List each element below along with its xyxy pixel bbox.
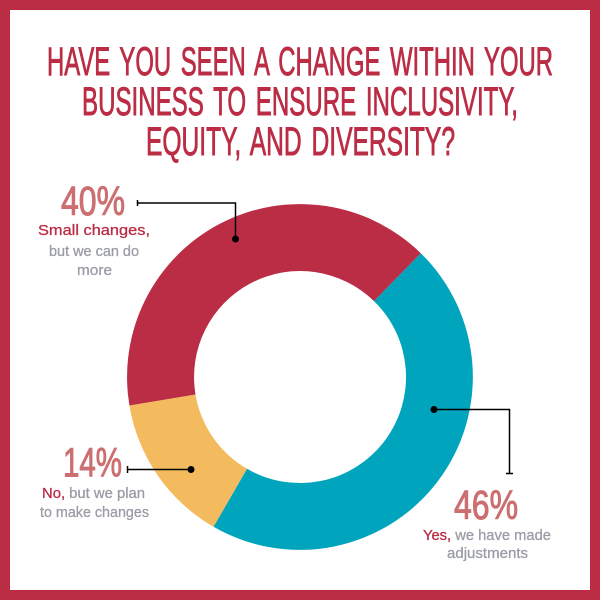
- label: 40% small changes: but we can do: [49, 243, 139, 260]
- segment: yes 46%: [214, 253, 473, 550]
- segment: small changes 40%: [127, 204, 421, 406]
- leader line: 46%: [430, 406, 513, 474]
- label: 14% no: to make changes: [40, 504, 149, 521]
- segment: no 14%: [129, 394, 247, 527]
- label: 14% no: No, but we plan: [42, 485, 145, 502]
- label: 14% no: 14%: [63, 440, 122, 486]
- label: 14% no: [40, 440, 149, 521]
- label: 46% yes: 46%: [454, 482, 518, 528]
- label: 46% yes: [423, 482, 551, 562]
- donut chart: [127, 204, 473, 550]
- leader line: 40%: [137, 200, 239, 242]
- label: 40% small changes: Small changes,: [38, 222, 150, 239]
- label: 40% small changes: 40%: [61, 178, 125, 224]
- label: 46% yes: Yes, we have made: [423, 527, 551, 544]
- title: [47, 40, 553, 164]
- label: 40% small changes: more: [77, 262, 112, 279]
- label: 46% yes: adjustments: [447, 545, 528, 562]
- label: 40% small changes: [38, 178, 150, 279]
- leader line: 14%: [127, 466, 194, 473]
